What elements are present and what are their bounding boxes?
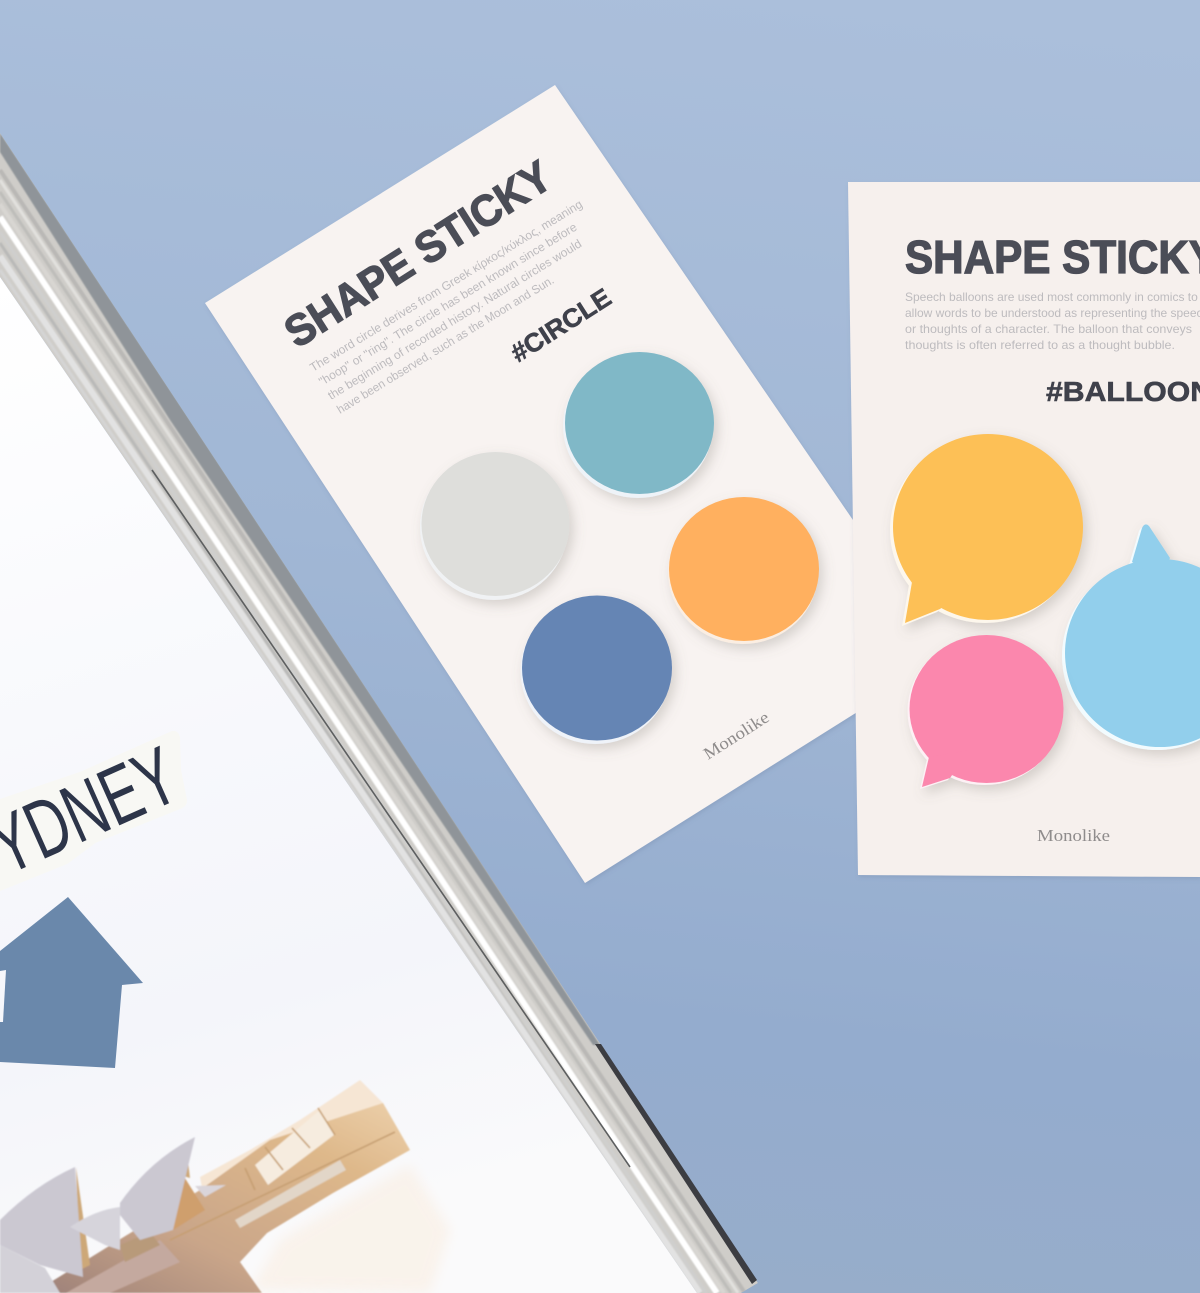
- book: inner gutter line: [152, 470, 630, 1167]
- book: dark outer edge slit: [595, 1044, 757, 1284]
- text block: circle description: "hoop" or "ring". The circle has been known since before: [316, 220, 580, 389]
- brand: Monolike on circle card: Monolike: [700, 708, 773, 763]
- sticky: pink speech balloon: [908, 635, 1064, 789]
- text block: balloon description: or thoughts of a character. The balloon that conveys: [905, 322, 1192, 336]
- text block: balloon description: thoughts is often referred to as a thought bubble.: [905, 338, 1175, 352]
- sticky: navy circle: [520, 596, 672, 744]
- text block: circle description: have been observed, such as the Moon and Sun.: [334, 273, 556, 417]
- card: balloon shape sticky: [848, 182, 1200, 877]
- book page: [0, 277, 697, 1293]
- sticky: teal circle: [563, 352, 714, 498]
- card: circle shape sticky: [205, 85, 905, 883]
- sticker: Sydney: [0, 730, 191, 907]
- text block: balloon description: Speech balloons are used most commonly in comics to: [905, 290, 1198, 304]
- sticky: light blue speech balloon: [1062, 524, 1200, 750]
- text block: circle description: the beginning of recorded history. Natural circles would: [325, 236, 584, 403]
- book: spine and page block: [0, 133, 758, 1293]
- heading: #BALLOON tag: #BALLOON: [1046, 376, 1200, 407]
- house shaped paper cut-out: [0, 897, 143, 1068]
- text block: circle description: The word circle derives from Greek κίρκος/κύκλος, meaning: [307, 197, 585, 375]
- sticky: yellow speech balloon: [890, 434, 1083, 626]
- book photo: Sydney harbour and opera house: [0, 1080, 450, 1293]
- heading: #CIRCLE tag: #CIRCLE: [505, 282, 617, 368]
- text block: balloon description: [905, 290, 1200, 352]
- sticky: orange circle: [668, 497, 819, 644]
- brand: Monolike on balloon card: Monolike: [1037, 826, 1110, 845]
- heading: Shape Sticky on circle card: SHAPE STICKY: [276, 152, 560, 357]
- sticky: grey circle: [420, 452, 570, 600]
